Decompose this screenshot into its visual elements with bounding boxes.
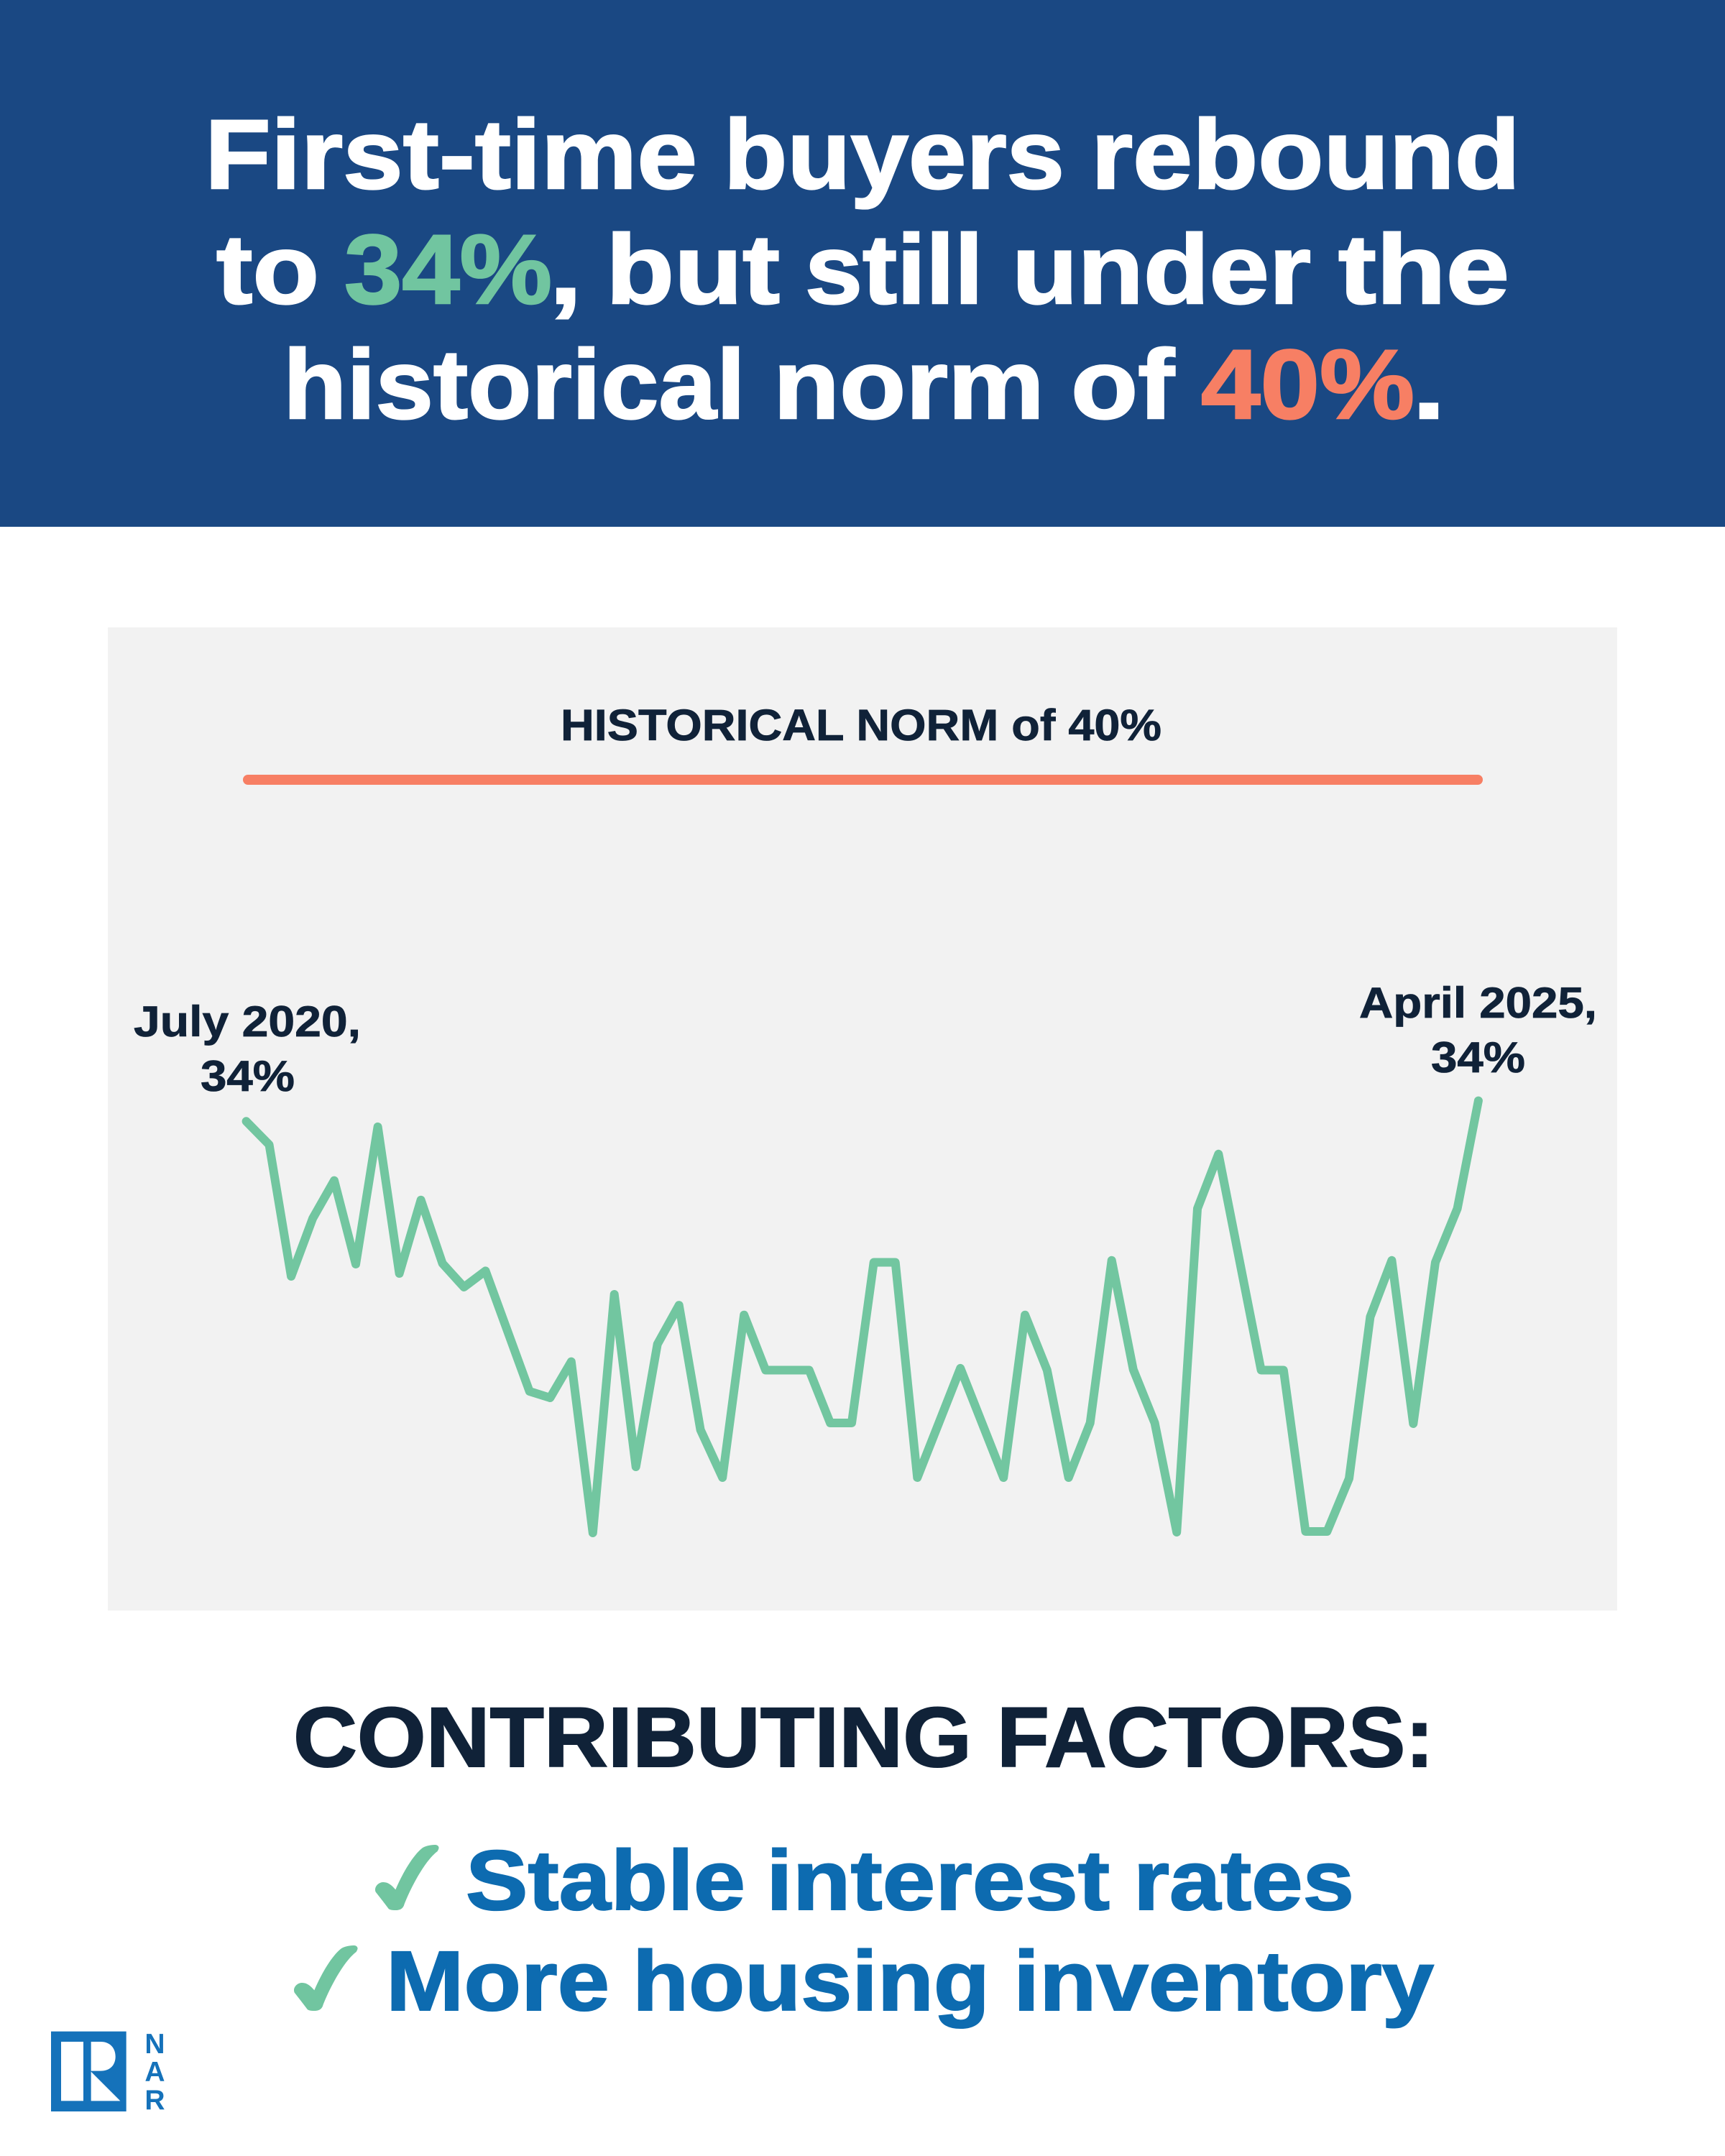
logo letters: R xyxy=(144,2085,165,2116)
factor: more housing inventory: More xyxy=(386,1934,610,2029)
label: April 2025 end xyxy=(1359,979,1597,1082)
heading: contributing factors xyxy=(293,1690,1434,1785)
title: line 3 lead: of xyxy=(1071,330,1174,440)
title: line 2 remainder: , xyxy=(549,215,582,325)
factor: more housing inventory xyxy=(386,1934,1434,2029)
title: line 1: rebound xyxy=(1091,100,1520,210)
label: July 2020 start: 34% xyxy=(201,1052,295,1100)
heading: historical norm label: HISTORICAL NORM of 40% xyxy=(561,701,1162,750)
title: line 1 xyxy=(205,100,1520,210)
title: line 1: First-time xyxy=(205,100,697,210)
panel: line chart xyxy=(108,627,1617,1611)
logo letters: A xyxy=(144,2057,165,2088)
icon: check mark 1 xyxy=(375,1845,439,1910)
factor: stable interest rates: Stable xyxy=(466,1833,745,1928)
label: July 2020 start xyxy=(134,998,361,1100)
title: line 3 lead: norm xyxy=(773,330,1044,440)
icon: realtor R block xyxy=(51,2032,126,2111)
title: final period: . xyxy=(1412,330,1445,440)
logo letters: N xyxy=(144,2029,165,2060)
icon: check mark 2 xyxy=(294,1945,358,2011)
title: 34% highlight: 34% xyxy=(344,215,552,325)
title: line 2 remainder: still xyxy=(805,215,983,325)
label: April 2025 end: 34% xyxy=(1431,1033,1525,1082)
heading: contributing factors: CONTRIBUTING xyxy=(293,1690,972,1785)
historical norm reference line xyxy=(248,775,1478,785)
title: line 2 remainder: under xyxy=(1012,215,1311,325)
header banner xyxy=(0,0,1725,527)
logo letters xyxy=(144,2029,165,2116)
title: line 3 lead xyxy=(283,330,1174,440)
title: line 3 lead: historical xyxy=(283,330,745,440)
title: line 1: buyers xyxy=(724,100,1064,210)
title: line 2 remainder: the xyxy=(1338,215,1509,325)
title: line 2 lead: to xyxy=(216,215,319,325)
title: 40% highlight: 40% xyxy=(1201,330,1414,440)
factor: stable interest rates xyxy=(466,1833,1354,1928)
label: July 2020 start: July 2020, xyxy=(134,998,361,1046)
factor: stable interest rates: rates xyxy=(1133,1833,1354,1928)
title: line 2 remainder xyxy=(549,215,1509,325)
logo: NAR xyxy=(51,2029,165,2116)
factor: more housing inventory: housing xyxy=(632,1934,990,2029)
title: line 2 remainder: but xyxy=(606,215,780,325)
label: April 2025 end: April 2025, xyxy=(1359,979,1597,1027)
factor: stable interest rates: interest xyxy=(766,1833,1110,1928)
factor: more housing inventory: inventory xyxy=(1013,1934,1434,2029)
chart line: first-time buyer share xyxy=(247,1101,1478,1533)
heading: contributing factors: FACTORS: xyxy=(997,1690,1434,1785)
